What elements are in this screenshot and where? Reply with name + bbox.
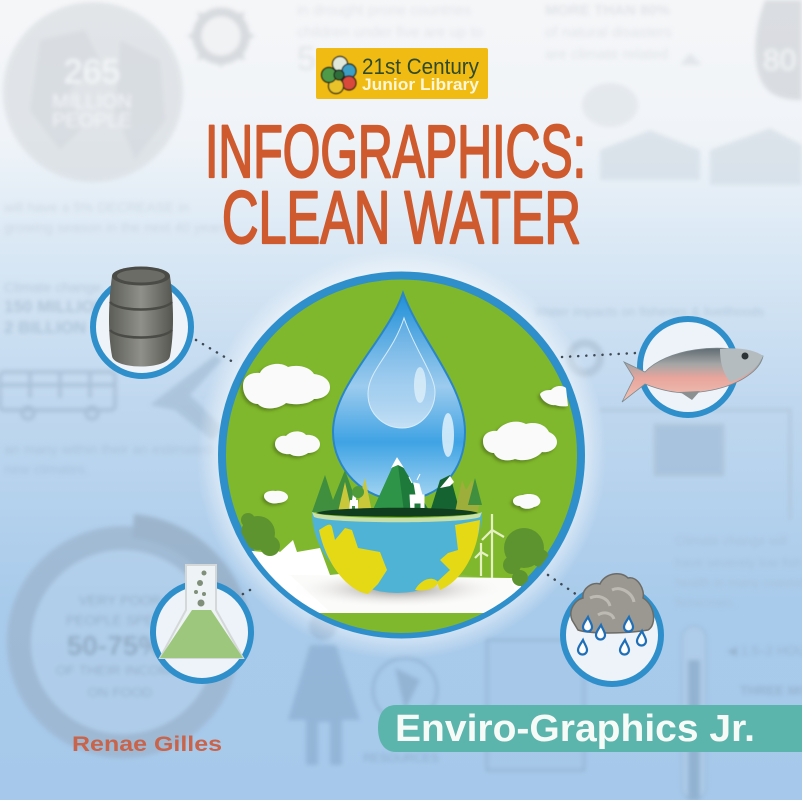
ghost globe with population figure: PEOPLE (52, 110, 132, 132)
wind turbines (475, 514, 504, 578)
ghost globe with population figure: MILLION (52, 91, 132, 113)
ghost gear and chart (570, 343, 790, 520)
icon: flower logo (322, 56, 356, 94)
ghost left text: 150 MILLION (4, 297, 107, 316)
title: INFOGRAPHICS: (205, 110, 586, 193)
ghost person (288, 612, 360, 765)
main illustration circle (218, 272, 585, 638)
ghost airplane (150, 355, 225, 440)
ghost right text: fishermen. (675, 595, 736, 610)
ghost disaster text (545, 2, 672, 63)
ghost right text (535, 304, 802, 610)
ghost left text: an many within their an estimated (4, 441, 213, 457)
icon: salmon (622, 348, 763, 402)
mountains forest and deer (312, 457, 482, 517)
logo text (362, 54, 480, 94)
ghost drought text: 5 (297, 40, 316, 78)
icon: flask with green liquid (160, 565, 243, 658)
ghost donut chart: ON FOOD (87, 684, 153, 700)
ghost left text: new climates. (4, 461, 89, 477)
ghost drought text: children under five are up to (297, 24, 483, 41)
author name: Renae Gilles (72, 733, 222, 756)
logo text: 21st Century (362, 54, 479, 79)
half globe (312, 512, 482, 594)
ghost bus (0, 372, 115, 419)
main circle glow (196, 250, 606, 660)
ghost leaf icon: RESOURCES (363, 751, 439, 765)
ghost left text: will have a 5% DECREASE in (3, 199, 189, 215)
logo text: Junior Library (362, 76, 480, 94)
ghost houses (582, 53, 802, 185)
ghost donut chart (19, 526, 240, 746)
ghost leaf icon (363, 658, 439, 765)
ghost drop with percentage: 80 (763, 44, 796, 77)
title: CLEAN WATER (222, 176, 581, 259)
icon circle: flask (153, 565, 251, 681)
ghost donut chart: OF THEIR INCOME (56, 662, 180, 678)
ghost thermometer (682, 626, 802, 800)
ghost left text (3, 199, 228, 477)
ghost donut chart: VERY POOR (79, 592, 161, 608)
ghost disaster text: are climate related (545, 46, 668, 63)
ghost disaster text: of natural disasters (545, 24, 672, 41)
series banner: Enviro-Graphics Jr. (395, 708, 755, 750)
icon: barrel (109, 266, 173, 366)
icon circle: fish (622, 319, 763, 415)
water drop (333, 293, 465, 500)
clouds (243, 364, 568, 509)
trees (241, 513, 549, 586)
ghost sun (187, 12, 255, 68)
icon circle: rain cloud (563, 574, 661, 684)
ghost left text: growing season in the next 40 years (4, 219, 228, 235)
ghost donut chart: 50-75% (67, 630, 163, 661)
ghost right text: health in many coastal (675, 575, 802, 590)
ghost phone panel (487, 640, 584, 770)
logo badge (316, 48, 488, 99)
title (205, 110, 586, 259)
icon circle: oil barrel (93, 266, 191, 376)
ghost drought text: in drought prone countries (297, 2, 471, 19)
ghost disaster text: MORE THAN 80% (545, 2, 670, 19)
icon: storm cloud with raindrops (571, 574, 654, 654)
ghost drop with percentage (755, 0, 802, 100)
ghost right text: Climate change will (675, 533, 787, 548)
connector dots (196, 340, 636, 606)
ghost globe with population figure: 265 (64, 53, 120, 91)
ghost right text: Water impacts on fisheries & livelihoods (535, 304, 765, 319)
ghost drought text (297, 2, 483, 78)
ghost left text: 2 BILLION (4, 318, 86, 337)
ghost left text: Climate change (4, 279, 101, 295)
ghost right text: have severely low fish (675, 555, 802, 570)
ghost globe with population figure (3, 2, 183, 182)
ghost donut chart: PEOPLE SPEND (66, 612, 174, 628)
ground and city silhouette (252, 540, 522, 633)
